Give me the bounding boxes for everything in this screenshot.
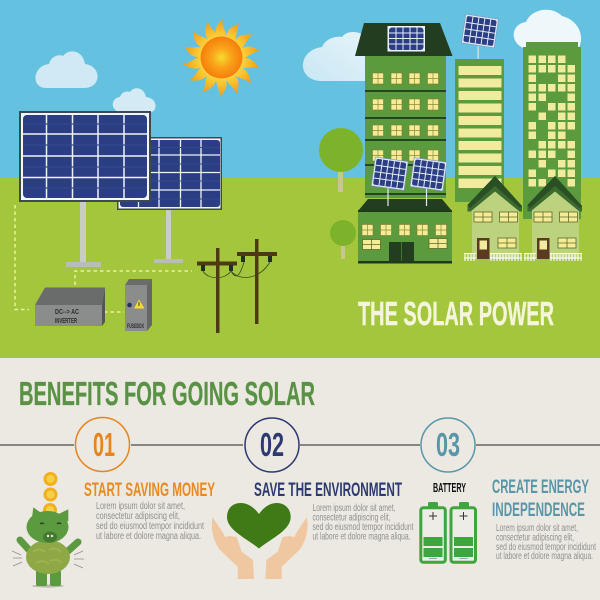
cloud behind panel: [113, 88, 156, 112]
cloud behind building: [303, 32, 370, 81]
step 02 badge: [245, 418, 299, 472]
step 03 badge: 03: [436, 426, 460, 463]
text block: saving money: Lorem ipsum dolor sit amet,: [96, 501, 185, 512]
step 01 badge: [76, 418, 130, 472]
step 03 badge: [421, 418, 475, 472]
inverter box: DC--> AC: [55, 309, 79, 316]
heading: create energy independence: [492, 477, 589, 521]
text block: saving money: [96, 501, 204, 542]
text block: environment: [312, 503, 414, 542]
timeline line: [0, 444, 600, 446]
text block: environment: Lorem ipsum dolor sit amet,: [312, 503, 396, 514]
text block: environment: consectetur adipiscing elit,: [312, 512, 390, 524]
icon: sun: [182, 19, 261, 97]
background: ground: [0, 178, 600, 358]
icon: piggy bank with coins: [12, 472, 84, 588]
utility poles: [197, 239, 277, 333]
text block: environment: sed do eiusmod tempor incididunt: [312, 522, 414, 533]
step 01 badge: 01: [93, 426, 115, 463]
background: lower benefits panel: [0, 358, 600, 600]
fusebox: FUSEBOX: [127, 324, 144, 330]
background: sky: [0, 0, 600, 179]
icon: batteries: [421, 502, 476, 562]
heading: start saving money: START SAVING MONEY: [84, 480, 215, 501]
house left: [464, 176, 522, 261]
apartment building: [355, 23, 452, 198]
text block: saving money: sed do eiusmod tempor incididunt: [96, 521, 204, 532]
heading: save the environment: SAVE THE ENVIRONMENT: [254, 480, 402, 501]
heading: benefits: BENEFITS FOR GOING SOLAR: [19, 375, 315, 412]
tree small: [330, 220, 356, 259]
solar panel front: [19, 111, 151, 267]
text block: independence: [496, 523, 596, 562]
icon: hands holding heart: [212, 503, 308, 579]
low office building: [358, 157, 452, 264]
text block: saving money: consectetur adipiscing elit,: [96, 511, 180, 522]
tree large: [319, 128, 363, 192]
solar panel back: [117, 137, 222, 263]
tower with right windows: [523, 42, 581, 219]
text block: saving money: ut labore et dolore magna aliqua.: [96, 531, 201, 542]
inverter box: [35, 288, 105, 326]
cloud left: [35, 51, 98, 88]
fusebox: [125, 279, 152, 331]
house right: [524, 176, 582, 261]
inverter box: INVERTER: [55, 318, 77, 325]
striped tower: [455, 14, 504, 202]
cloud top right: [514, 10, 581, 50]
step 02 badge: 02: [260, 426, 284, 463]
text block: environment: ut labore et dolore magna aliqua.: [312, 532, 410, 542]
dashed wiring: [15, 205, 192, 312]
label: battery: BATTERY: [433, 480, 466, 495]
